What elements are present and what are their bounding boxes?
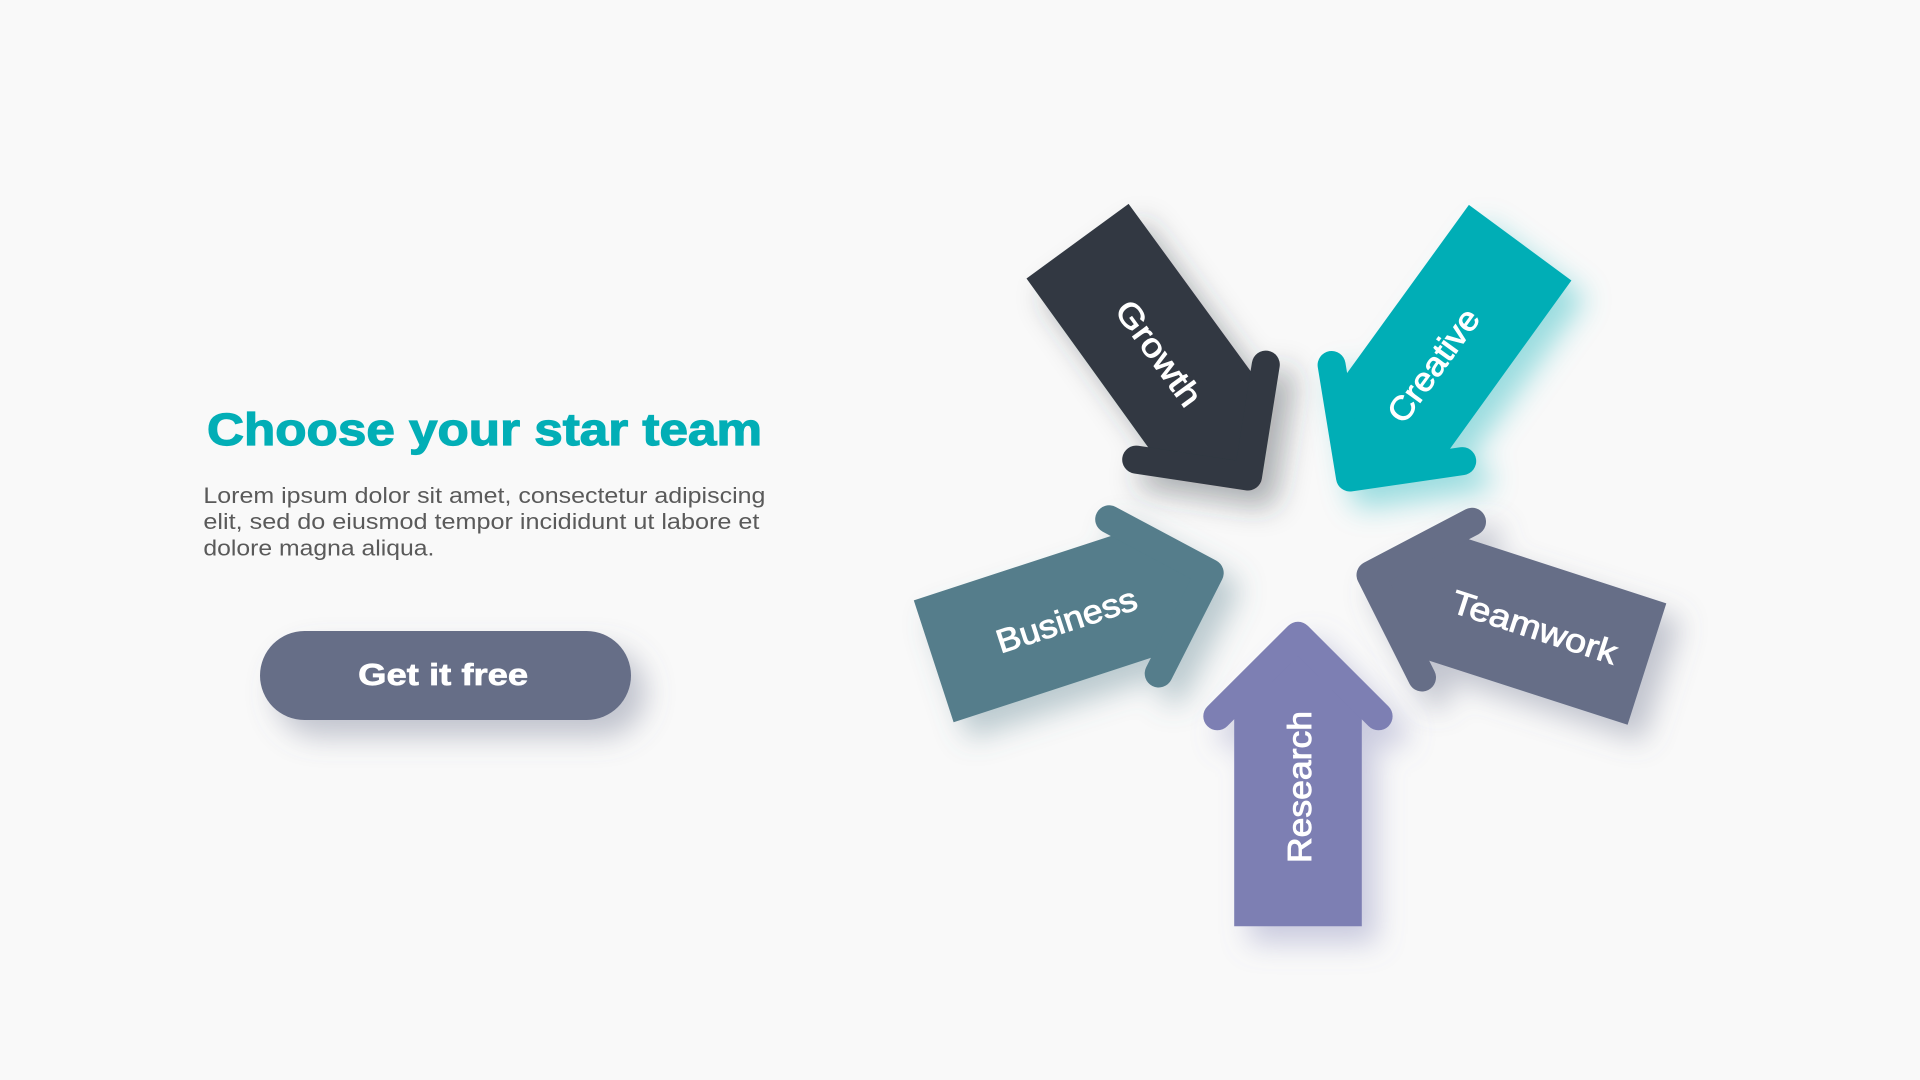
arrow: business	[914, 519, 1210, 722]
body text	[203, 483, 765, 560]
label: business: Business	[991, 580, 1142, 660]
label: growth: Growth	[1108, 293, 1210, 413]
arrow: creative	[1332, 205, 1571, 478]
label: research: Research	[1281, 711, 1318, 863]
button: get it free	[260, 631, 631, 720]
arrow: teamwork	[1370, 522, 1666, 725]
arrow: research	[1217, 636, 1379, 926]
label: teamwork: Teamwork	[1447, 583, 1623, 671]
title: Choose your star team	[207, 404, 762, 455]
body text: dolore magna aliqua.	[203, 535, 434, 560]
button: get it free: Get it free	[358, 657, 528, 692]
body text: Lorem ipsum dolor sit amet, consectetur adipiscing	[203, 483, 765, 508]
label: creative: Creative	[1379, 301, 1487, 430]
arrow: growth	[1026, 204, 1266, 476]
body text: elit, sed do eiusmod tempor incididunt ut labore et	[203, 509, 759, 534]
